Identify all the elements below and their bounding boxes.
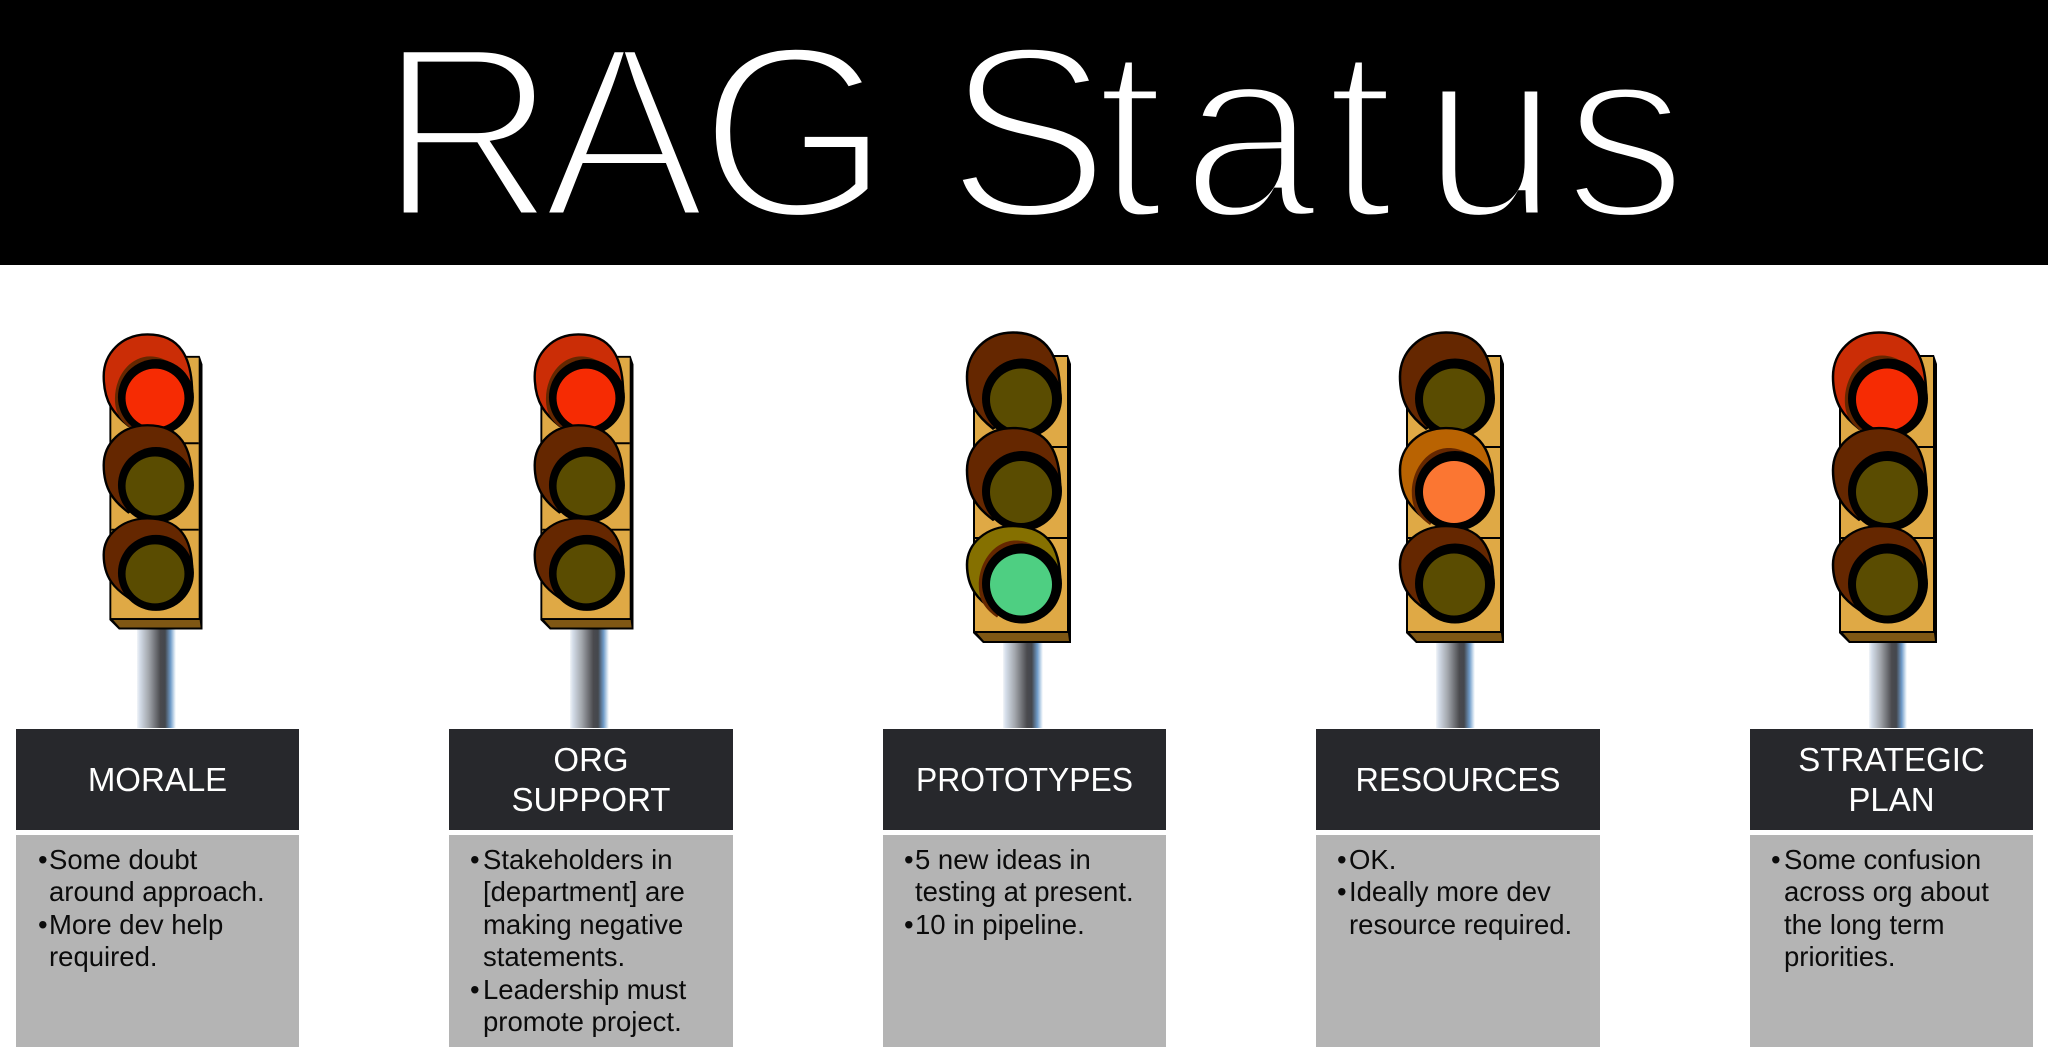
text: org support notes: promote project. (483, 1006, 682, 1037)
text: prototypes notes: testing at present. (915, 876, 1134, 907)
text: strategic plan notes (1750, 835, 2033, 1047)
text: prototypes notes: 10 in pipeline. (915, 909, 1085, 940)
text: org support notes: • (470, 844, 480, 875)
panel: org support (449, 334, 733, 1047)
label: strategic plan (1750, 729, 2033, 830)
traffic light: prototypes, green (967, 332, 1071, 643)
label: morale (16, 729, 299, 830)
text: strategic plan notes: the long term (1784, 909, 1945, 940)
text: org support notes: Leadership must (483, 974, 687, 1005)
text: prototypes notes: • (904, 844, 914, 875)
text: resources notes (1316, 835, 1600, 1047)
text: morale notes: More dev help (49, 909, 223, 940)
text: morale notes: required. (49, 941, 158, 972)
label: org support: ORG (553, 741, 629, 778)
label: resources (1316, 729, 1600, 830)
pole: prototypes (1003, 640, 1043, 728)
text: org support notes: [department] are (483, 876, 685, 907)
label: strategic plan: STRATEGIC (1798, 741, 1985, 778)
text: org support notes: Stakeholders in (483, 844, 673, 875)
text: morale notes: Some doubt (49, 844, 198, 875)
text: resources notes: OK. (1349, 844, 1396, 875)
panel: prototypes (883, 332, 1166, 1047)
text: strategic plan notes: across org about (1784, 876, 1989, 907)
text: prototypes notes: 5 new ideas in (915, 844, 1091, 875)
text: org support notes: • (470, 974, 480, 1005)
title banner (0, 0, 2048, 270)
title: RAG Status (379, 0, 1687, 270)
panel: resources (1316, 332, 1600, 1047)
text: prototypes notes: • (904, 909, 914, 940)
text: strategic plan notes: Some confusion (1784, 844, 1981, 875)
text: morale notes: • (38, 844, 48, 875)
label: morale: MORALE (88, 761, 227, 798)
text: resources notes: • (1337, 876, 1347, 907)
text: resources notes: resource required. (1349, 909, 1572, 940)
traffic light: org support, red (535, 334, 634, 629)
text: resources notes: Ideally more dev (1349, 876, 1551, 907)
label: strategic plan: PLAN (1848, 781, 1935, 818)
pole: morale (137, 628, 176, 728)
label: prototypes: PROTOTYPES (916, 761, 1133, 798)
pole: resources (1436, 640, 1475, 728)
text: prototypes notes (883, 835, 1166, 1047)
text: strategic plan notes: priorities. (1784, 941, 1896, 972)
text: org support notes: making negative (483, 909, 683, 940)
text: org support notes (449, 835, 733, 1047)
label: org support: SUPPORT (512, 781, 670, 818)
panel: morale (16, 334, 299, 1047)
traffic light: strategic plan, red (1833, 332, 1937, 643)
pole: strategic plan (1869, 640, 1907, 728)
text: strategic plan notes: • (1771, 844, 1781, 875)
label: org support (449, 729, 733, 830)
traffic light: morale, red (104, 334, 202, 629)
text: org support notes: statements. (483, 941, 625, 972)
text: morale notes: around approach. (49, 876, 265, 907)
text: morale notes: • (38, 909, 48, 940)
text: morale notes (16, 835, 299, 1047)
label: resources: RESOURCES (1356, 761, 1560, 798)
panel: strategic plan (1750, 332, 2033, 1047)
pole: org support (570, 628, 609, 728)
label: prototypes (883, 729, 1166, 830)
text: resources notes: • (1337, 844, 1347, 875)
traffic light: resources, amber (1400, 332, 1504, 643)
